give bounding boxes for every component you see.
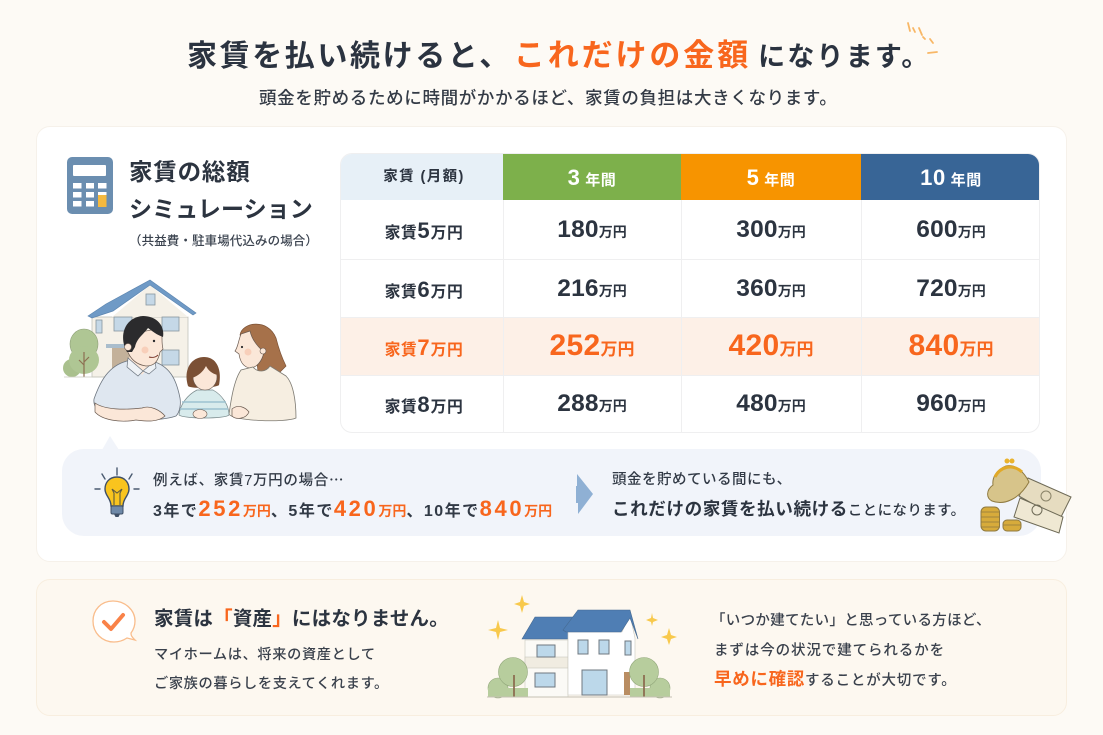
table header: 10 years: 10 年間 [920, 165, 982, 190]
panel note: （共益費・駐車場代込みの場合） [129, 234, 318, 248]
cell: 216万円 [557, 275, 627, 302]
callout text line two: これだけの家賃を払い続けることになります。 [612, 499, 966, 519]
cell: 600万円 [916, 216, 986, 243]
illustration: new house [487, 595, 677, 698]
callout text line one: 頭金を貯めている間にも、 [612, 472, 792, 488]
panel: bottom message [36, 579, 1067, 716]
cell highlighted: 420万円 [729, 329, 813, 362]
cell: 288万円 [557, 390, 627, 417]
woman [240, 324, 286, 372]
table header: monthly rent: 家賃 (月額) [383, 169, 465, 185]
example line two: 3年で252万円、5年で420万円、10年で840万円 [153, 496, 552, 521]
bottom text right line three: 早めに確認することが大切です。 [714, 669, 957, 689]
table header: 3 years: 3 年間 [568, 165, 616, 190]
cell: 300万円 [736, 216, 806, 243]
row label: 5: 家賃5万円 [385, 218, 463, 243]
icon: purse and money [980, 458, 1072, 534]
cell: 480万円 [736, 390, 806, 417]
table header: 5 years: 5 年間 [747, 165, 795, 190]
icon: title sparkle [907, 22, 938, 54]
subtitle: 頭金を貯めるために時間がかかるほど、家賃の負担は大きくなります。 [259, 88, 838, 108]
icon: calculator [67, 157, 113, 214]
child [179, 390, 229, 418]
panel: simulation [36, 126, 1067, 562]
row label: 6: 家賃6万円 [385, 277, 463, 302]
arrow [576, 474, 593, 514]
cell highlighted: 252万円 [550, 329, 634, 362]
bottom text left: マイホームは、将来の資産として ご家族の暮らしを支えてくれます。 [154, 647, 389, 692]
title: 家賃を払い続けると、これだけの金額 になります。 [187, 38, 931, 73]
callout: example [62, 449, 1041, 536]
bottom text right: 「いつか建てたい」と思っている方ほど、 [711, 613, 991, 629]
illustration: family and house [63, 280, 296, 422]
row label: 7: 家賃7万円 [385, 335, 463, 360]
panel heading line two: シミュレーション [129, 196, 313, 222]
cell: 180万円 [557, 216, 627, 243]
cell: 720万円 [916, 275, 986, 302]
bottom heading: 家賃は「資産」にはなりません。 [154, 608, 449, 630]
icon: light bulb [94, 467, 140, 517]
panel heading: 家賃の総額 [129, 159, 250, 185]
cell: 360万円 [736, 275, 806, 302]
example line one: 例えば、家賃7万円の場合… [153, 469, 344, 490]
icon: check bubble [92, 600, 137, 643]
bottom text right line two: まずは今の状況で建てられるかを [714, 643, 945, 659]
callout tail [103, 436, 118, 449]
table: rent totals [340, 153, 1040, 433]
cell highlighted: 840万円 [909, 329, 993, 362]
cell: 960万円 [916, 390, 986, 417]
man [94, 361, 180, 420]
row label: 8: 家賃8万円 [385, 392, 463, 417]
